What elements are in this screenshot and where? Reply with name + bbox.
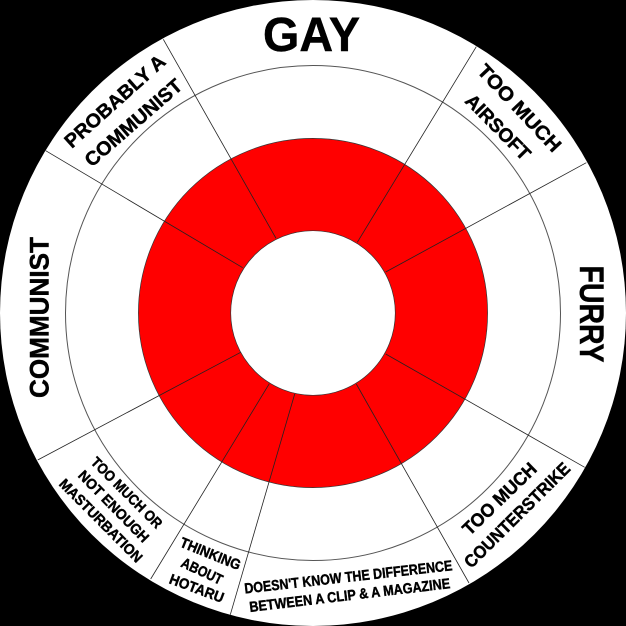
red ring outlines [138,138,488,488]
label: clip and magazine: BETWEEN A CLIP & A MAGAZINE [249,576,451,616]
label: probably a communist: PROBABLY A [60,51,170,153]
label: too much counterstrike: TOO MUCH [458,458,541,539]
label: too much airsoft: AIRSOFT [460,90,535,165]
label: clip and magazine: DOESN'T KNOW THE DIFFERENCE [244,558,453,597]
label: GAY: GAY [263,9,360,62]
label: thinking about hotaru: THINKING [178,535,243,574]
label: probably a communist: COMMUNIST [81,75,187,171]
label: COMMUNIST: COMMUNIST [24,237,54,398]
label: too much airsoft: TOO MUCH [473,60,565,157]
middle ring outline [66,66,560,560]
label: FURRY: FURRY [572,266,610,363]
red ring [185,185,441,441]
label: too much counterstrike: COUNTERSTRIKE [460,458,574,572]
label: thinking about hotaru: HOTARU [167,572,226,607]
label: masturbation [55,455,165,566]
label: masturbation: NOT ENOUGH [74,468,152,546]
label: thinking about hotaru: ABOUT [178,555,225,589]
label: thinking about hotaru [167,535,243,607]
label: clip and magazine [244,558,453,616]
label: masturbation: TOO MUCH OR [87,455,165,533]
label: masturbation: MASTURBATION [55,476,145,566]
